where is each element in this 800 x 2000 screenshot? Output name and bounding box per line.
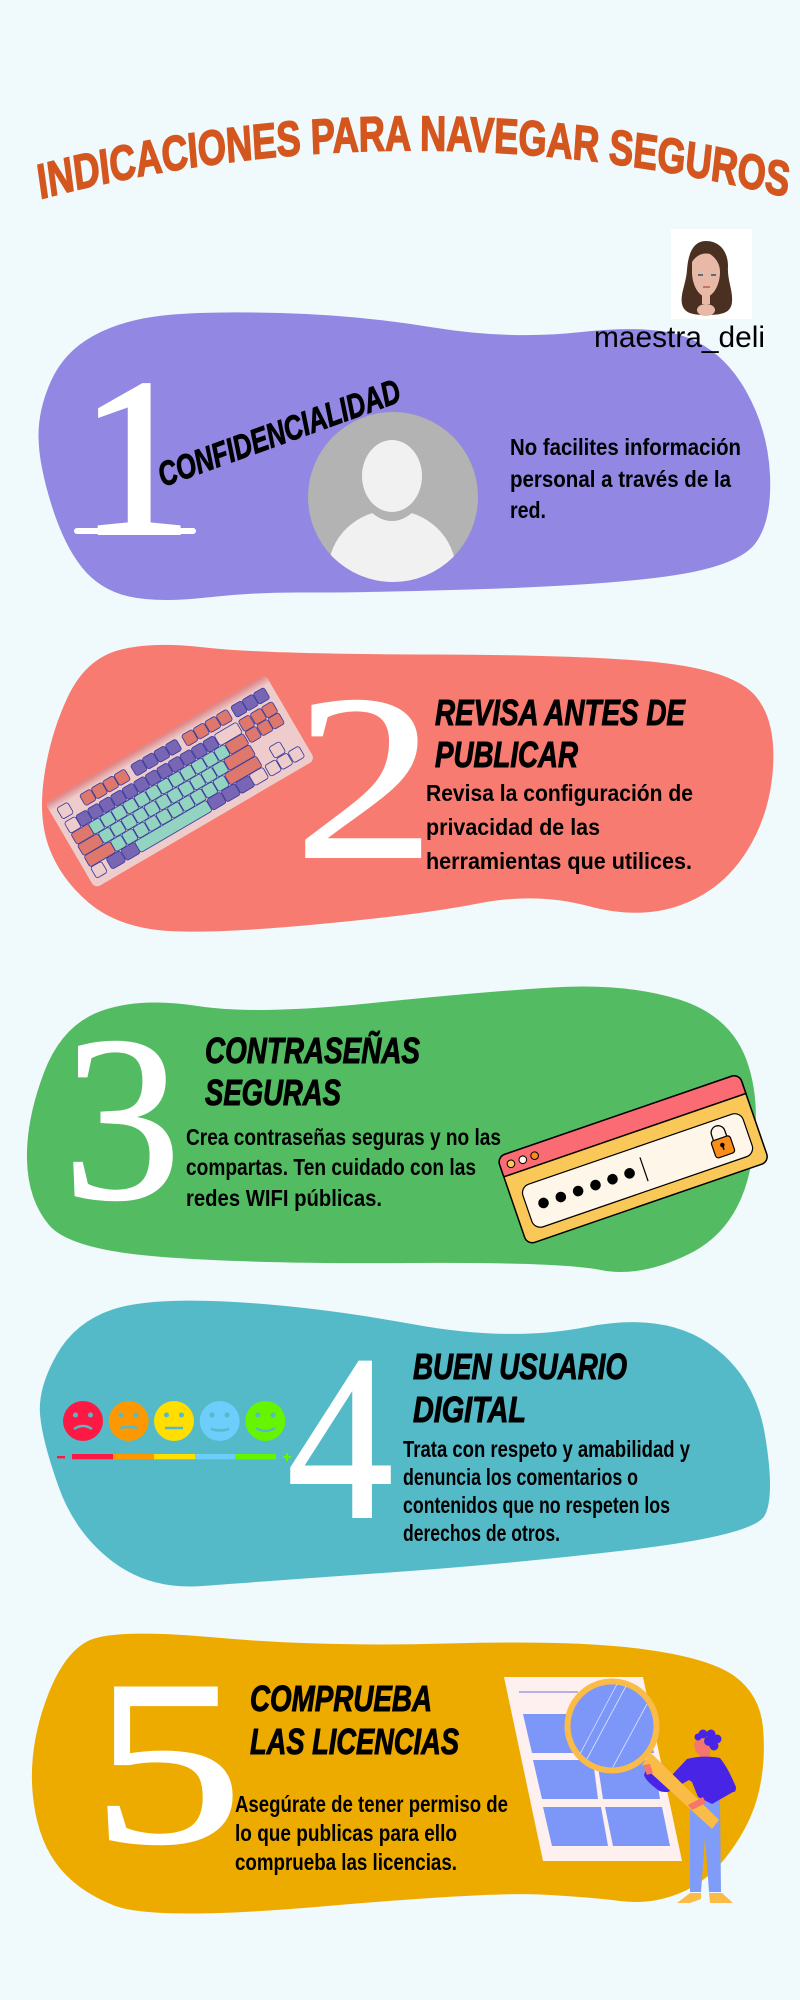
illustration: password window <box>497 1074 769 1245</box>
panel: revisa antes de publicar <box>42 645 773 932</box>
text: revisa body: herramientas que utilices. <box>426 848 692 874</box>
text: revisa body: Revisa la configuración de <box>426 780 693 806</box>
panel 1 background blob <box>38 312 770 600</box>
panel: comprueba las licencias <box>32 1631 764 1914</box>
heading: contraseñas seguras: SEGURAS <box>205 1072 341 1113</box>
icon: rating faces <box>57 1401 291 1461</box>
number 4: 4 <box>287 1307 393 1569</box>
heading: revisa antes de publicar <box>435 692 686 775</box>
text: confidencialidad body <box>510 434 741 523</box>
text: revisa body: privacidad de las <box>426 814 600 840</box>
illustration: document with magnifier and person <box>504 1677 736 1903</box>
heading: comprueba las licencias: COMPRUEBA <box>250 1678 432 1719</box>
text: buen usuario body: denuncia los comentarios o <box>403 1464 638 1490</box>
person <box>644 1730 736 1903</box>
panel 2 background blob <box>42 645 773 932</box>
text: contraseñas body <box>186 1124 501 1211</box>
text: revisa body <box>426 780 693 874</box>
panel 3 background blob <box>27 987 756 1272</box>
number 5: 5 <box>91 1631 243 1893</box>
hands <box>643 1764 706 1810</box>
heading: buen usuario digital <box>413 1346 627 1430</box>
heading: comprueba las licencias <box>250 1678 459 1762</box>
magnifier <box>568 1682 719 1829</box>
text: comprueba body <box>235 1791 508 1875</box>
author avatar <box>671 229 752 319</box>
title: INDICACIONES PARA NAVEGAR SEGUROS <box>37 116 790 200</box>
text: buen usuario body: contenidos que no respeten los <box>403 1492 670 1518</box>
number 1: 1 <box>80 334 192 582</box>
heading: revisa antes de publicar: PUBLICAR <box>435 734 578 775</box>
heading: contraseñas seguras <box>205 1029 420 1113</box>
document <box>504 1677 682 1861</box>
heading: buen usuario digital: DIGITAL <box>413 1389 526 1430</box>
heading: contraseñas seguras: CONTRASEÑAS <box>205 1029 420 1071</box>
author name: maestra_deli <box>594 321 765 354</box>
text: buen usuario body <box>403 1436 690 1546</box>
illustration: keyboard <box>45 674 315 888</box>
panel 4 background blob <box>40 1301 770 1586</box>
text: comprueba body: Asegúrate de tener permiso de <box>235 1791 508 1817</box>
text: buen usuario body: derechos de otros. <box>403 1520 560 1546</box>
text: contraseñas body: compartas. Ten cuidado con las <box>186 1154 476 1180</box>
text: buen usuario body: Trata con respeto y amabilidad y <box>403 1436 690 1462</box>
text: comprueba body: comprueba las licencias. <box>235 1849 457 1875</box>
text: confidencialidad body: red. <box>510 497 546 523</box>
panel: buen usuario digital <box>40 1301 770 1586</box>
number 2: 2 <box>294 648 436 909</box>
panel: confidencialidad <box>38 312 770 600</box>
panel: contraseñas seguras <box>27 987 769 1272</box>
heading: confidencialidad: CONFIDENCIALIDAD <box>153 372 406 495</box>
text: confidencialidad body: No facilites información <box>510 434 741 460</box>
scale bar <box>57 1453 291 1461</box>
text: contraseñas body: Crea contraseñas seguras y no las <box>186 1124 501 1150</box>
heading: buen usuario digital: BUEN USUARIO <box>413 1346 627 1387</box>
text: contraseñas body: redes WIFI públicas. <box>186 1185 382 1211</box>
text: comprueba body: lo que publicas para ello <box>235 1820 457 1846</box>
heading: revisa antes de publicar: REVISA ANTES DE <box>435 692 686 733</box>
heading: comprueba las licencias: LAS LICENCIAS <box>250 1721 459 1762</box>
text: confidencialidad body: personal a través de la <box>510 466 731 492</box>
number 3: 3 <box>63 989 181 1250</box>
panel 5 background blob <box>32 1634 764 1914</box>
icon: user avatar <box>308 412 478 582</box>
